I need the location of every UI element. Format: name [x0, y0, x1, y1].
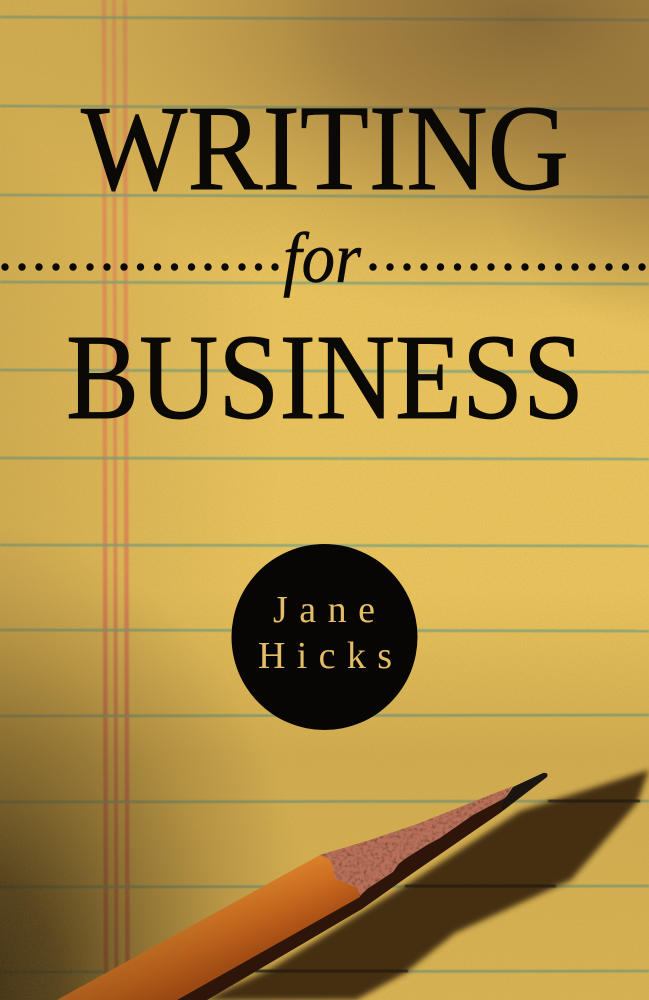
pencil painted body	[57, 855, 360, 1000]
author first name: Jane	[273, 589, 375, 631]
black circle	[232, 544, 418, 730]
pencil	[57, 773, 548, 1000]
pencil cast shadow	[205, 770, 649, 1000]
red margin lines	[104, 0, 128, 1000]
ruled lines darkened by shadow	[255, 801, 640, 971]
pencil body shading	[57, 855, 360, 1000]
title: WRITING: WRITING	[81, 81, 569, 216]
pencil dark underside	[170, 795, 510, 1000]
title: for: for	[283, 218, 362, 298]
dotted rule left	[1, 263, 279, 271]
title: BUSINESS: BUSINESS	[66, 310, 584, 445]
exposed wood	[320, 786, 513, 896]
graphite tip	[500, 773, 548, 813]
author badge	[232, 544, 418, 730]
author last name: Hicks	[258, 635, 392, 677]
dotted rule right	[369, 263, 646, 271]
